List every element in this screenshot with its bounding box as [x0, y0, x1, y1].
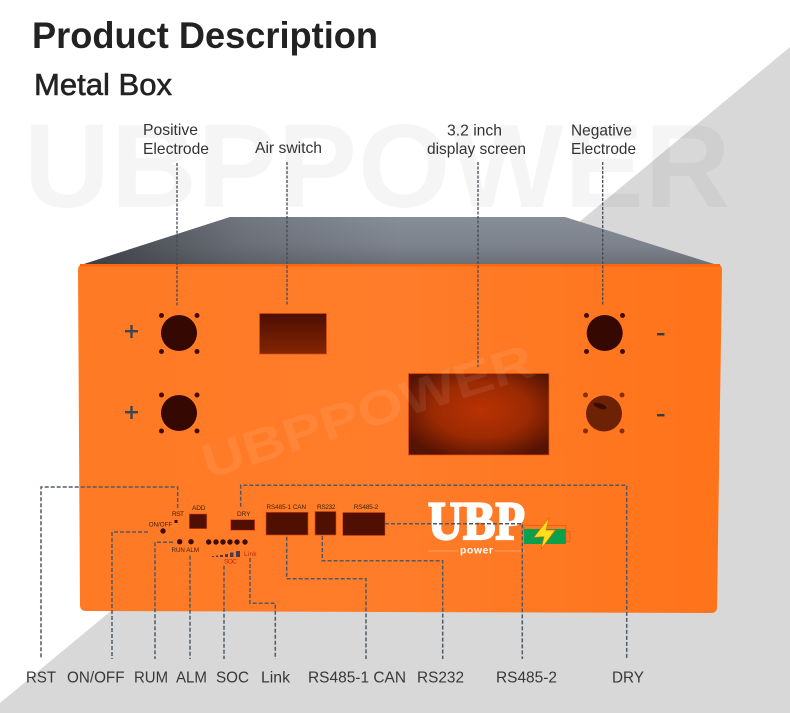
bottom labels: RUM	[134, 670, 168, 686]
port panel	[149, 504, 385, 566]
port labels: Link	[244, 551, 257, 558]
plus signs	[125, 325, 138, 419]
port labels: RUN ALM	[172, 547, 199, 554]
label: negative electrode: Electrode	[571, 141, 636, 158]
metal box	[78, 217, 722, 613]
label: negative electrode: Negative	[571, 122, 632, 140]
port labels: RST	[172, 511, 184, 518]
logo wordmark: UBP	[428, 491, 525, 551]
port cutouts	[189, 512, 385, 536]
label: display screen: display screen	[427, 141, 526, 158]
bottom labels: RST	[26, 670, 56, 686]
box front face	[78, 264, 722, 613]
port labels: RS232	[317, 504, 336, 511]
bottom labels: RS232	[417, 670, 464, 686]
port labels: RS485-1 CAN	[266, 504, 306, 511]
port labels: ADD	[192, 505, 206, 512]
port labels: DRY	[237, 511, 251, 518]
box top face	[84, 217, 714, 264]
title: Product Description	[32, 15, 378, 56]
port labels: SOC	[224, 558, 237, 566]
UBP power logo	[428, 491, 570, 556]
subtitle: Metal Box	[34, 67, 172, 102]
bottom labels: ON/OFF	[67, 670, 125, 686]
label: negative electrode	[571, 122, 636, 158]
port labels: ON/OFF	[149, 522, 172, 528]
bottom labels	[26, 670, 644, 686]
label: display screen	[427, 122, 526, 158]
bottom labels: ALM	[176, 670, 207, 686]
minus signs	[657, 333, 664, 416]
label: positive electrode: Positive	[143, 122, 198, 139]
bottom labels: Link	[261, 670, 291, 686]
indicator dots	[160, 520, 248, 545]
label: positive electrode	[143, 122, 209, 158]
box watermark: UBPPOWER	[195, 335, 540, 489]
positive electrode terminals	[159, 313, 200, 434]
air switch cutout	[260, 314, 326, 354]
label: air switch: Air switch	[255, 140, 322, 157]
bottom callout lines	[41, 485, 627, 659]
bottom labels: RS485-1 CAN	[308, 670, 406, 686]
negative electrode terminals	[583, 313, 625, 434]
SOC bars	[212, 551, 240, 557]
battery icon	[524, 517, 570, 549]
bottom labels: DRY	[612, 670, 644, 686]
logo tagline: power	[460, 544, 493, 556]
top callout lines	[177, 162, 603, 367]
top labels	[143, 122, 636, 158]
port labels: RS485-2	[354, 504, 379, 511]
label: positive electrode: Electrode	[143, 141, 209, 158]
label: display screen: 3.2 inch	[447, 122, 502, 140]
bottom labels: RS485-2	[496, 670, 557, 686]
bottom labels: SOC	[216, 670, 249, 686]
display screen cutout	[408, 374, 549, 455]
background watermark UBPPOWER: UBPPOWER	[24, 100, 731, 233]
port labels	[149, 504, 379, 566]
